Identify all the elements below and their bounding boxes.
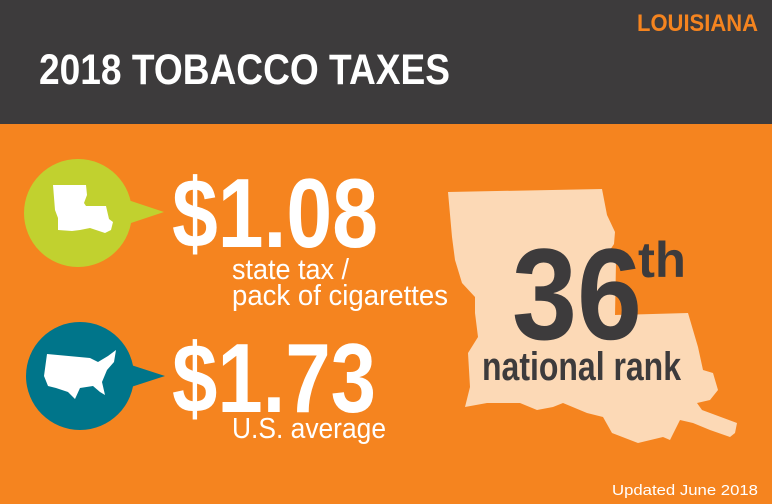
map: Louisiana with rank: [448, 189, 737, 443]
icon: USA in blue bubble: [26, 322, 165, 430]
state tax value: $1.08: [172, 158, 378, 268]
map: Louisiana with rank: th: [638, 232, 686, 288]
header bar: [0, 0, 772, 124]
US average value: $1.73: [172, 323, 376, 433]
title: 2018 TOBACCO TAXES: [39, 46, 450, 94]
state tax value: pack of cigarettes: [232, 280, 448, 312]
icon: Louisiana in green bubble: [24, 159, 164, 267]
US average value: U.S. average: [232, 413, 386, 445]
state label: LOUISIANA: [637, 10, 758, 37]
state tax value: state tax /: [232, 254, 350, 286]
footer note: Updated June 2018: [612, 482, 758, 499]
rank number: 36: [512, 221, 642, 367]
rank label: national rank: [482, 345, 682, 389]
state tax value: [172, 158, 448, 312]
